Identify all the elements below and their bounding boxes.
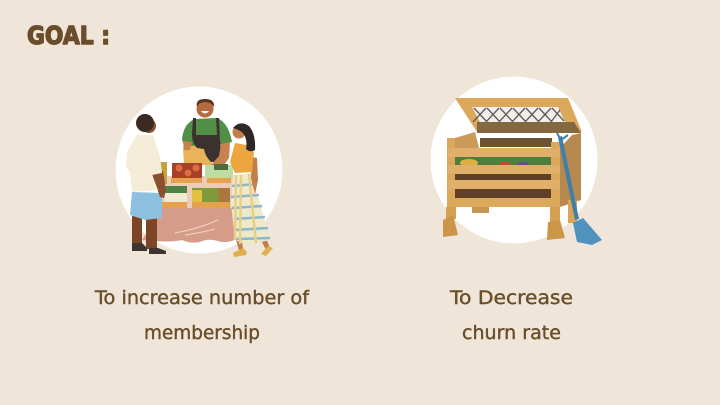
customer man (126, 114, 166, 254)
text: membership goal (94, 287, 310, 344)
shovel (557, 133, 602, 245)
open lid with lattice (455, 98, 582, 133)
icon: market stall illustration (116, 86, 282, 257)
icon: wooden compost bin illustration (430, 76, 602, 245)
back wall and side (455, 132, 581, 223)
customer woman (230, 123, 273, 257)
bin interior (455, 155, 551, 199)
front planks and posts (443, 138, 565, 240)
text: churn goal (449, 287, 573, 344)
seller (182, 99, 232, 172)
text: churn goal: churn rate (462, 322, 561, 344)
table cloth (142, 176, 237, 243)
text: membership goal: To increase number of (94, 287, 310, 309)
text: churn goal: To Decrease (449, 287, 573, 309)
produce crates (159, 162, 233, 208)
title: GOAL : (27, 21, 110, 50)
text: membership goal: membership (144, 322, 260, 344)
